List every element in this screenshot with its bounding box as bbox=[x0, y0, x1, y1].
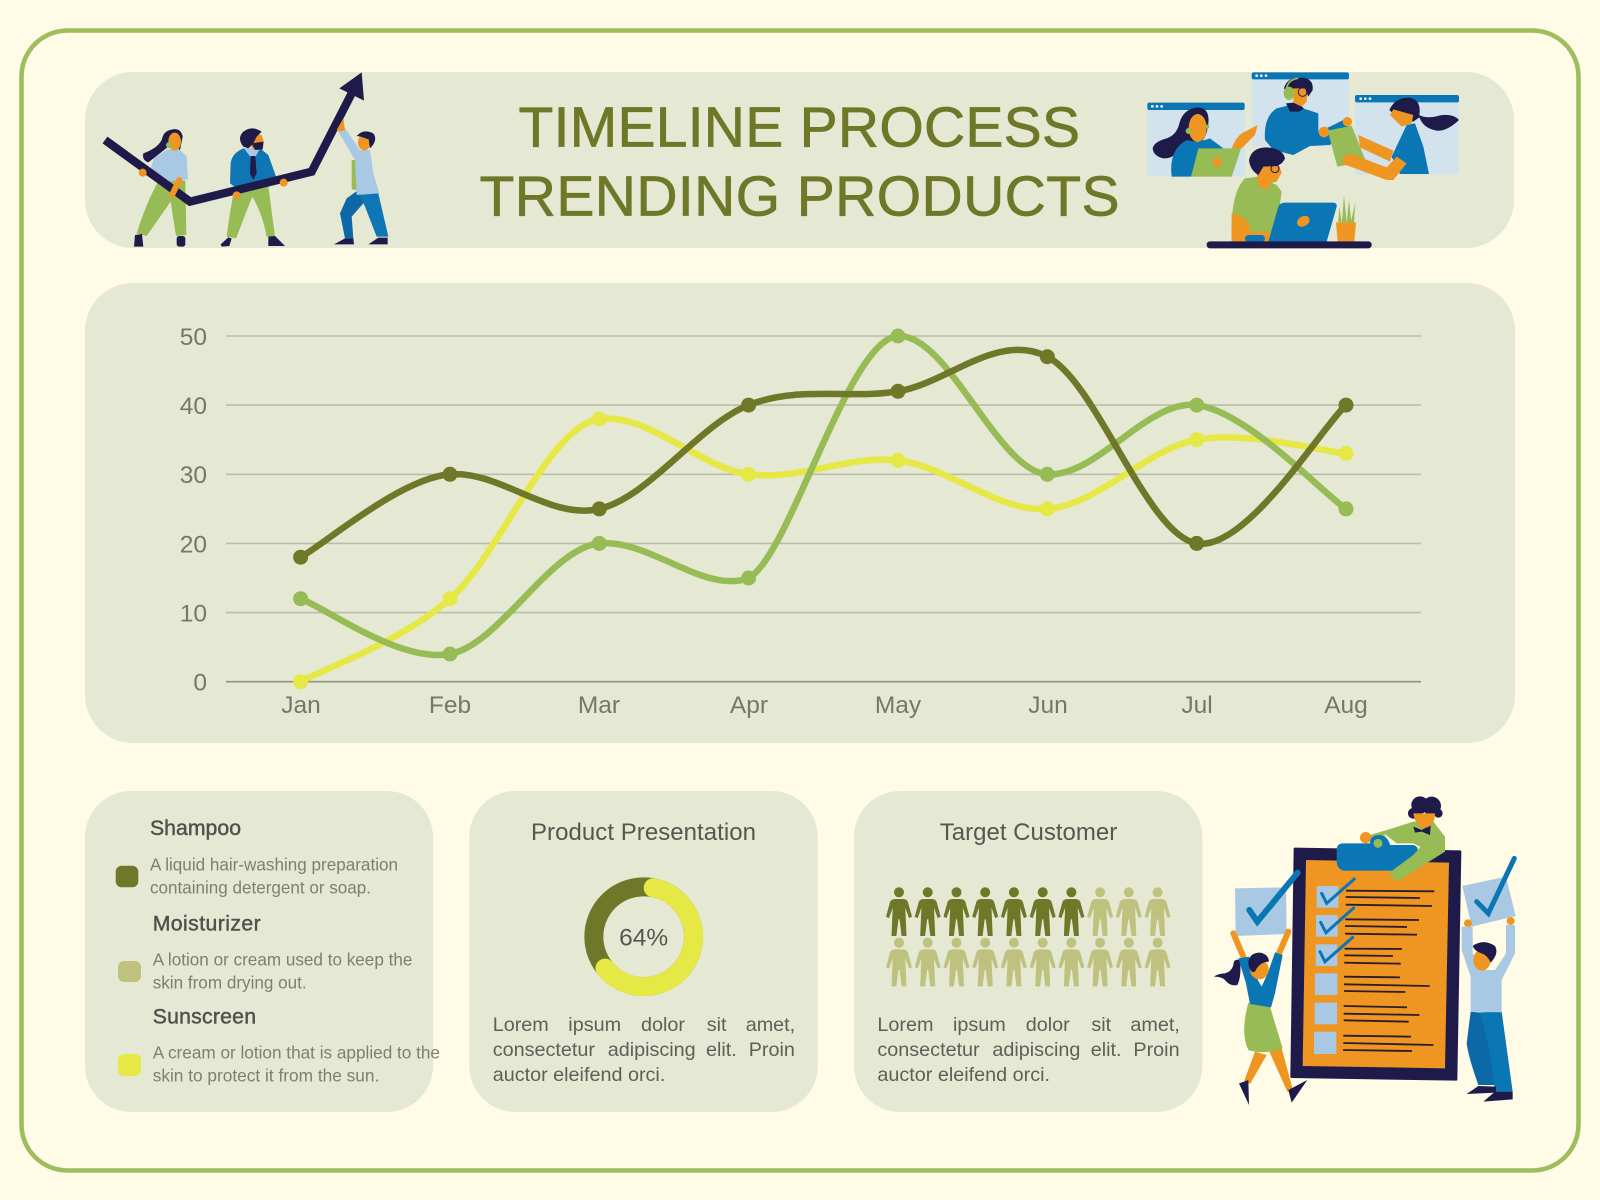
body text: elit. bbox=[706, 1039, 737, 1061]
legend item: shampoo: A liquid hair-washing preparation bbox=[150, 855, 398, 875]
series: moisturizer line bbox=[293, 328, 1354, 662]
title bbox=[480, 96, 1120, 229]
body text: amet, bbox=[746, 1014, 795, 1036]
y axis labels: 50 bbox=[180, 324, 207, 351]
heading: Product Presentation bbox=[531, 819, 756, 846]
x axis labels: Jul bbox=[1181, 692, 1213, 719]
donut chart 64% bbox=[594, 887, 694, 987]
body text: ipsum bbox=[953, 1014, 1006, 1036]
illustration: team with checklist clipboard bbox=[1214, 796, 1516, 1105]
x axis labels: Feb bbox=[429, 692, 471, 719]
y axis labels: 0 bbox=[193, 670, 207, 697]
heading: Target Customer bbox=[940, 819, 1117, 846]
chart grid lines bbox=[226, 336, 1421, 682]
legend item: moisturizer: A lotion or cream used to keep the bbox=[153, 950, 412, 970]
legend item: sunscreen: A cream or lotion that is applied to the bbox=[153, 1042, 440, 1062]
body text: Proin bbox=[1133, 1039, 1180, 1061]
y axis labels bbox=[180, 324, 207, 697]
body text: consectetur bbox=[877, 1039, 980, 1061]
body text: dolor bbox=[1026, 1014, 1070, 1036]
y axis labels: 40 bbox=[180, 393, 207, 420]
y axis labels: 10 bbox=[180, 600, 207, 628]
legend item: sunscreen bbox=[118, 1005, 440, 1086]
y axis labels: 20 bbox=[180, 531, 207, 558]
panel: header bbox=[85, 72, 1514, 248]
x axis labels: Jun bbox=[1028, 692, 1068, 719]
body text: auctor eleifend orci. bbox=[493, 1064, 665, 1086]
body text: sit bbox=[707, 1014, 727, 1036]
body text: sit bbox=[1091, 1014, 1112, 1036]
series: shampoo line bbox=[293, 349, 1354, 565]
x axis labels: May bbox=[875, 692, 922, 719]
pictogram: 7 of 20 people highlighted bbox=[886, 887, 1171, 986]
x axis labels: Apr bbox=[730, 692, 768, 719]
body text: dolor bbox=[641, 1014, 685, 1036]
y axis labels: 30 bbox=[180, 462, 207, 489]
title: TRENDING PRODUCTS bbox=[480, 165, 1120, 229]
legend item: shampoo: containing detergent or soap. bbox=[150, 877, 371, 897]
x axis labels bbox=[281, 692, 1368, 719]
body text: adipiscing bbox=[992, 1039, 1080, 1061]
legend item: moisturizer: skin from drying out. bbox=[153, 972, 307, 992]
panel: product presentation bbox=[469, 791, 818, 1112]
x axis labels: Mar bbox=[578, 692, 620, 719]
legend item: moisturizer: Moisturizer bbox=[153, 913, 261, 936]
panel: legend bbox=[85, 791, 440, 1112]
legend item: shampoo bbox=[116, 817, 398, 897]
legend item: shampoo: Shampoo bbox=[150, 817, 241, 840]
x axis labels: Aug bbox=[1324, 692, 1368, 719]
illustration: team lifting rising arrow bbox=[105, 72, 388, 247]
panel: target customer bbox=[854, 791, 1202, 1112]
series: sunscreen line bbox=[293, 412, 1354, 689]
body text: elit. bbox=[1091, 1039, 1121, 1061]
body text: auctor eleifend orci. bbox=[877, 1064, 1050, 1086]
legend item: sunscreen: skin to protect it from the sun. bbox=[153, 1066, 379, 1086]
body text: Lorem bbox=[877, 1014, 933, 1036]
x axis labels: Jan bbox=[281, 692, 321, 719]
title: TIMELINE PROCESS bbox=[518, 96, 1080, 160]
legend item: moisturizer bbox=[118, 913, 412, 992]
body text: Proin bbox=[749, 1039, 795, 1061]
body text: ipsum bbox=[568, 1014, 621, 1036]
body text: adipiscing bbox=[608, 1039, 696, 1061]
donut chart 64%: 64% bbox=[619, 925, 668, 952]
panel: line chart bbox=[85, 283, 1515, 743]
illustration: remote video call team bbox=[1147, 72, 1459, 248]
legend item: sunscreen: Sunscreen bbox=[153, 1005, 256, 1028]
body text: amet, bbox=[1130, 1014, 1180, 1036]
body text: Lorem bbox=[493, 1014, 549, 1036]
body text: consectetur bbox=[493, 1039, 595, 1061]
